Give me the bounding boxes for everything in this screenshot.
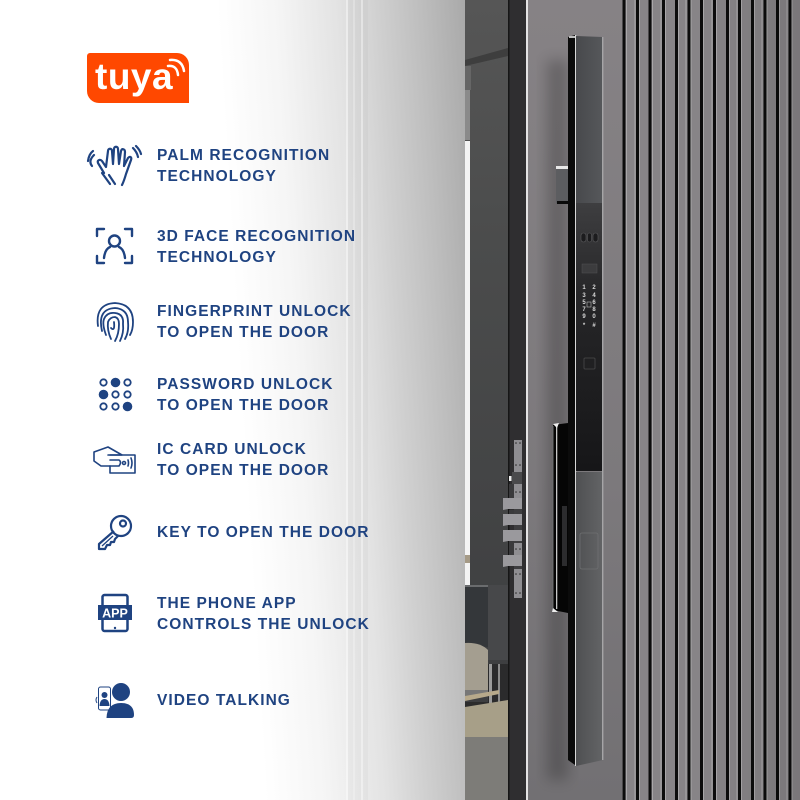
top latch [556, 166, 568, 204]
feature: video talking [96, 683, 291, 718]
icon: palm [86, 144, 142, 186]
label: IC CARD UNLOCK [157, 441, 307, 458]
label [157, 376, 334, 414]
label: FINGERPRINT UNLOCK [157, 303, 352, 320]
sensors and keypad: 8 [592, 307, 596, 313]
label: PASSWORD UNLOCK [157, 376, 334, 393]
lock body rail [568, 35, 603, 766]
label: TECHNOLOGY [157, 168, 277, 185]
icon: fingerprint [96, 302, 134, 342]
icon: video call [96, 683, 134, 718]
label: CONTROLS THE UNLOCK [157, 616, 370, 633]
sensors and keypad: 9 [582, 314, 586, 320]
label [157, 228, 356, 266]
label: THE PHONE APP [157, 595, 297, 612]
label [157, 303, 352, 341]
label: 3D FACE RECOGNITION [157, 228, 356, 245]
icon: face scan [96, 228, 134, 264]
sensors and keypad: 4 [592, 293, 596, 299]
feature: key [98, 514, 370, 550]
label: TO OPEN THE DOOR [157, 397, 329, 414]
feature: phone app [98, 594, 370, 633]
icon: key [98, 514, 132, 550]
label: VIDEO TALKING [157, 692, 291, 709]
label: TECHNOLOGY [157, 249, 277, 266]
sensors and keypad: 6 [592, 300, 596, 306]
feature: 3D face recognition [96, 228, 356, 266]
feature: fingerprint unlock [96, 302, 352, 342]
sensors and keypad: 0 [592, 314, 596, 320]
sensors and keypad [581, 233, 598, 369]
icon: tablet app: APP [102, 606, 128, 620]
icon: keypad dots [98, 378, 132, 412]
feature: palm recognition [86, 144, 330, 186]
feature: IC card unlock [93, 441, 329, 479]
label: KEY TO OPEN THE DOOR [157, 524, 370, 541]
lower grip handle [552, 423, 568, 613]
sensors and keypad: * [583, 323, 586, 329]
logo: tuya: tuya [95, 56, 173, 97]
label: TO OPEN THE DOOR [157, 324, 329, 341]
sensors and keypad: 7 [582, 307, 586, 313]
logo: tuya [87, 53, 189, 103]
sensors and keypad: 1 [582, 285, 586, 291]
label [157, 441, 329, 479]
label [157, 147, 330, 185]
label [157, 595, 370, 633]
white to grey gradient panel [0, 0, 465, 800]
sensors and keypad: # [592, 323, 596, 329]
mortise lock [503, 440, 522, 598]
sensors and keypad: 2 [592, 285, 596, 291]
label: TO OPEN THE DOOR [157, 462, 329, 479]
sensors and keypad: 3 [582, 293, 586, 299]
feature: password unlock [98, 376, 334, 414]
icon: tablet app [98, 594, 132, 632]
label: PALM RECOGNITION [157, 147, 330, 164]
sensors and keypad: 5 [582, 300, 586, 306]
icon: hand with card [93, 446, 136, 474]
